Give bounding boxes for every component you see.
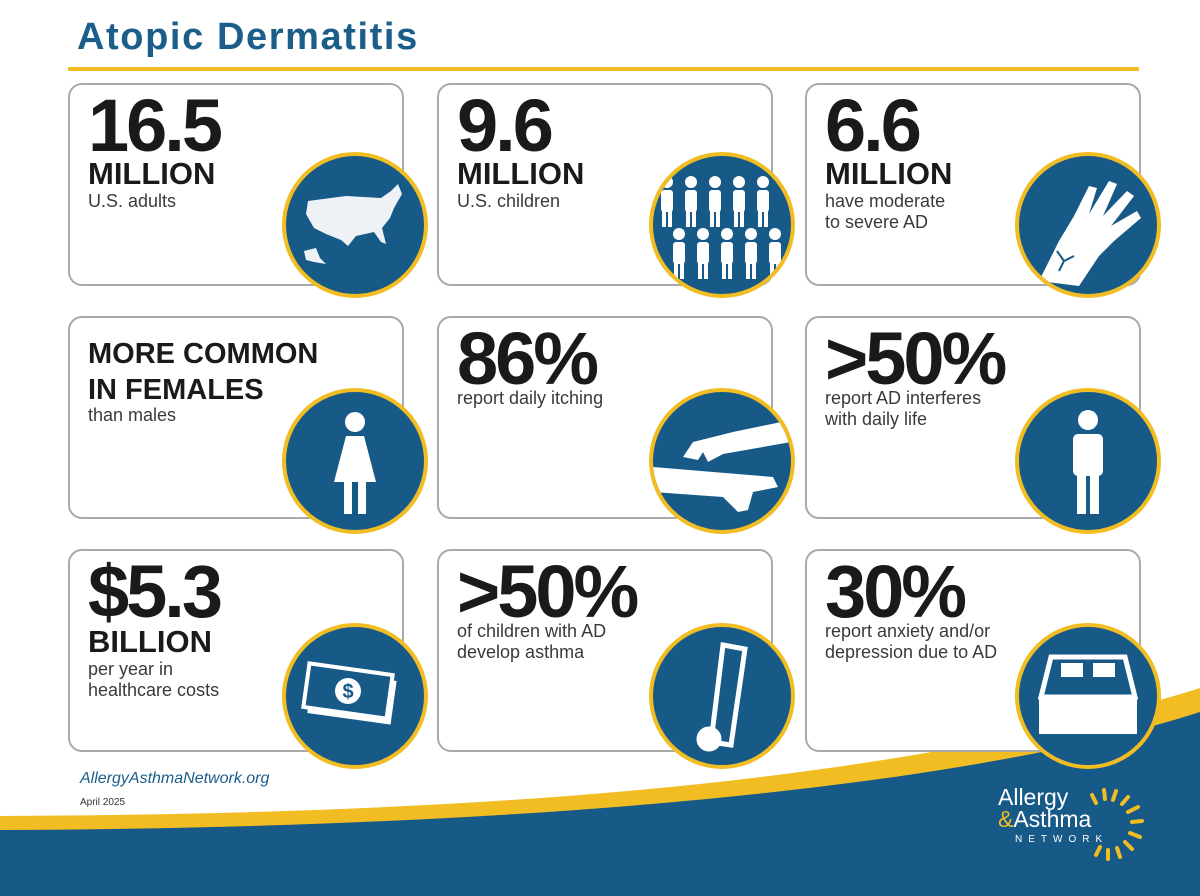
card: $5.3 billion: per year in	[88, 659, 173, 679]
card: 30% anxiety: report anxiety and/or	[825, 621, 990, 641]
icon: cracked hand	[1015, 152, 1161, 298]
logo: Allergy	[998, 784, 1068, 810]
card: 9.6 million children: MILLION	[457, 156, 584, 191]
card: 30% anxiety: depression due to AD	[825, 642, 997, 662]
date: April 2025	[80, 797, 125, 808]
logo	[998, 784, 1144, 861]
logo: &Asthma	[998, 806, 1091, 832]
card: more common in females	[68, 316, 404, 519]
card: 6.6 million moderate severe: 6.6	[825, 84, 919, 167]
icon: US map	[282, 152, 428, 298]
icon: children	[649, 152, 795, 298]
card: 16.5 million adults	[68, 83, 404, 286]
logo: NETWORK	[1015, 834, 1108, 845]
icon: inhaler	[649, 623, 795, 769]
title: Atopic Dermatitis	[77, 16, 419, 58]
card: more common in females: MORE COMMON	[88, 338, 318, 370]
card: 16.5 million adults: 16.5	[88, 84, 220, 167]
card: >50% daily life: >50%	[825, 317, 1004, 400]
icon: female	[282, 388, 428, 534]
icon: bed	[1015, 623, 1161, 769]
icon: money	[282, 623, 428, 769]
card: 86% itching: 86%	[457, 317, 596, 400]
card: $5.3 billion: BILLION	[88, 624, 212, 659]
card: >50% daily life	[805, 316, 1141, 519]
card: 86% itching: report daily itching	[457, 388, 603, 408]
card: >50% asthma: of children with AD	[457, 621, 606, 641]
icon: scratching hands	[649, 388, 795, 534]
card: >50% daily life: report AD interferes	[825, 388, 981, 408]
card: 6.6 million moderate severe	[805, 83, 1141, 286]
card: 16.5 million adults: U.S. adults	[88, 191, 176, 211]
card: >50% asthma	[437, 549, 773, 752]
card: $5.3 billion	[68, 549, 404, 752]
card: 9.6 million children	[437, 83, 773, 286]
card: more common in females: than males	[88, 405, 176, 425]
card: >50% asthma: develop asthma	[457, 642, 584, 662]
card: >50% daily life: with daily life	[825, 409, 927, 429]
card: 16.5 million adults: MILLION	[88, 156, 215, 191]
footer url: AllergyAsthmaNetwork.org	[80, 770, 269, 787]
card: 30% anxiety: 30%	[825, 550, 964, 633]
card: >50% asthma: >50%	[457, 550, 636, 633]
card: 86% itching	[437, 316, 773, 519]
card: 30% anxiety	[805, 549, 1141, 752]
card: 6.6 million moderate severe: to severe AD	[825, 212, 928, 232]
icon: male	[1015, 388, 1161, 534]
card: more common in females: IN FEMALES	[88, 374, 264, 406]
card: $5.3 billion: $5.3	[88, 550, 220, 633]
card: 6.6 million moderate severe: have moderate	[825, 191, 945, 211]
card: 9.6 million children: U.S. children	[457, 191, 560, 211]
card: 9.6 million children: 9.6	[457, 84, 551, 167]
icon: money: $	[342, 681, 354, 703]
card: $5.3 billion: healthcare costs	[88, 680, 219, 700]
card: 6.6 million moderate severe: MILLION	[825, 156, 952, 191]
